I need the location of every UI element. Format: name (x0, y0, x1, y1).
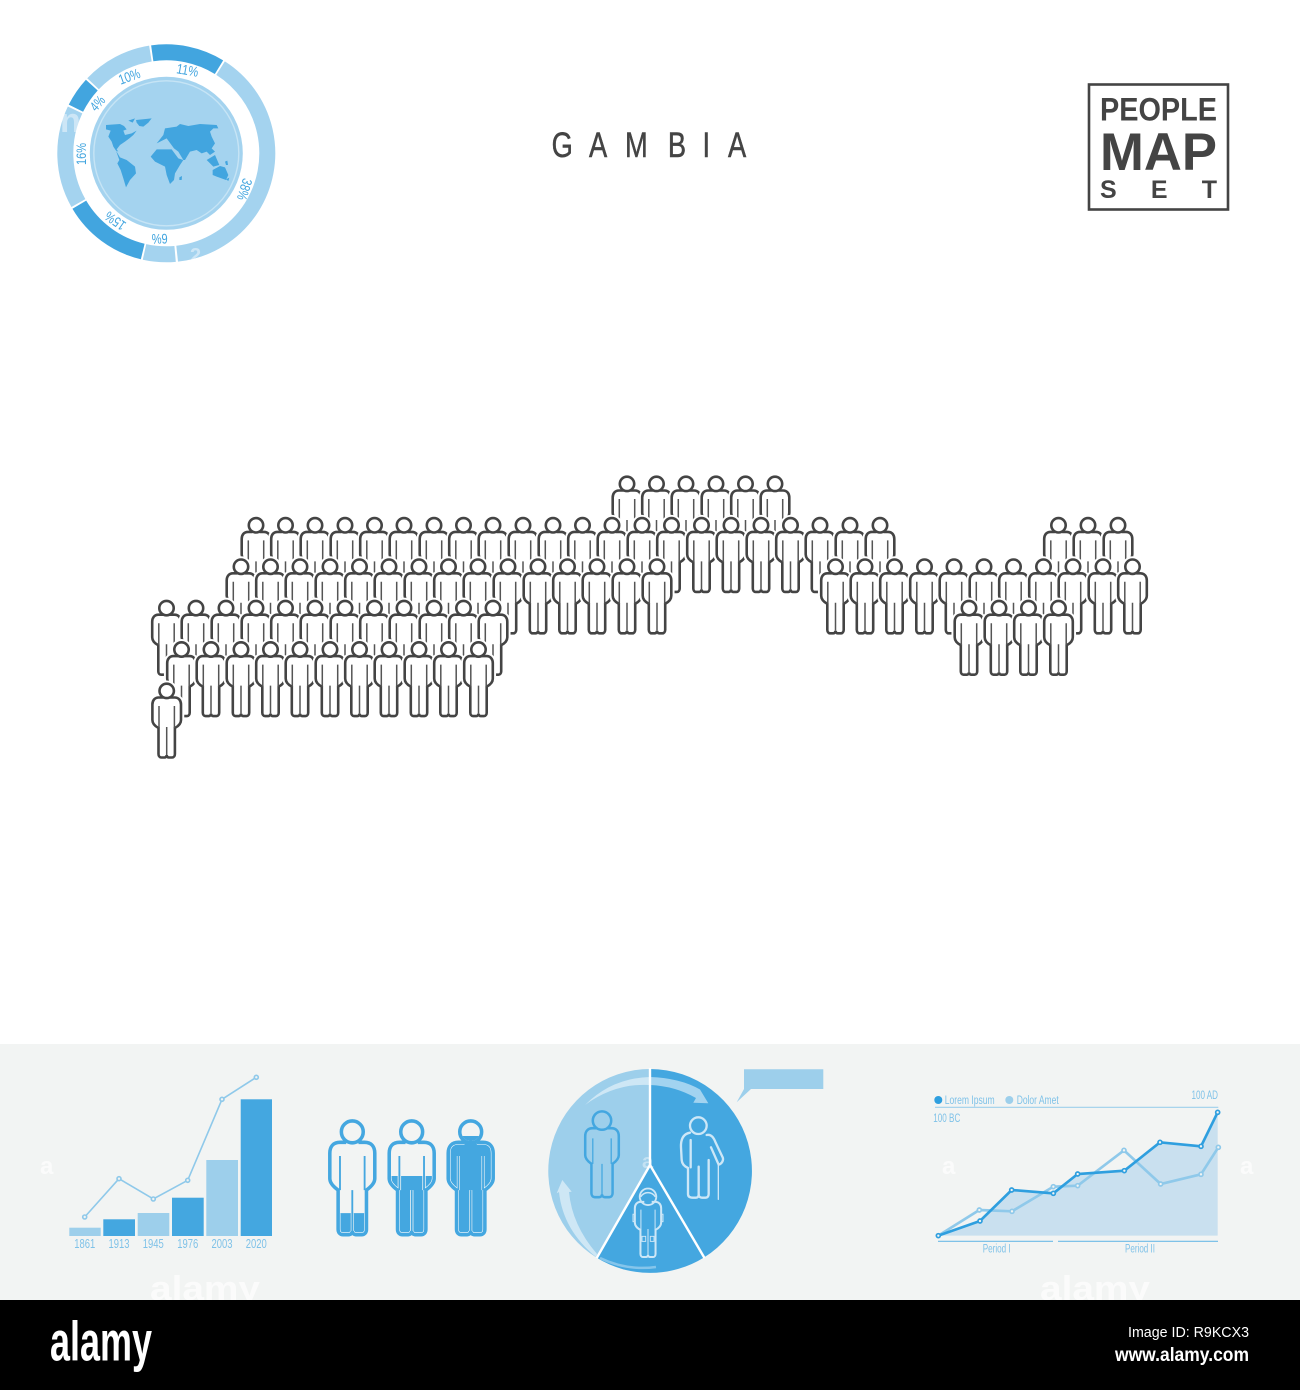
donut chart with world map (24, 11, 309, 296)
year labels: 1861 (74, 1236, 95, 1251)
year labels: 1976 (177, 1236, 198, 1251)
alamy logo: alamy (50, 1310, 152, 1373)
pie sector: elderly (650, 1069, 752, 1258)
website: www.alamy.com (1114, 1345, 1249, 1366)
panel watermarks: a (942, 1153, 956, 1180)
row 2 (242, 518, 1132, 592)
ring percentage labels (73, 60, 256, 247)
watermark glyphs on ring: 2 (190, 245, 201, 267)
area fill (938, 1112, 1218, 1236)
panel watermarks: alamy (150, 1270, 260, 1308)
people map of Gambia (152, 477, 1147, 758)
ring percentage labels: 16% (73, 143, 89, 165)
panel watermarks: alamy (1040, 1270, 1150, 1308)
donut ring segments (24, 11, 309, 296)
left cycle arrow (557, 1180, 597, 1257)
year labels: 1945 (143, 1236, 164, 1251)
legend: Lorem Ipsum (945, 1095, 995, 1107)
series: Lorem Ipsum (936, 1110, 1220, 1238)
year labels: 2003 (212, 1236, 232, 1251)
panel watermarks (40, 1153, 1254, 1308)
pie sector: child (597, 1166, 704, 1273)
panel watermarks: a (40, 1153, 54, 1180)
globe disc (90, 77, 243, 230)
ring percentage labels: 6% (151, 231, 168, 247)
plot (936, 1110, 1220, 1238)
ring percentage labels: 15% (102, 208, 129, 234)
icon: child (633, 1188, 663, 1257)
legend (934, 1095, 1059, 1107)
period labels: Period I (983, 1244, 1011, 1256)
pie chart: life stages (548, 1068, 752, 1273)
axis labels: 100 AD (1192, 1090, 1218, 1102)
icon: three people fill levels (330, 1121, 493, 1235)
badge: people map set: PEOPLE (1100, 92, 1217, 128)
icon: elderly person with cane (681, 1117, 723, 1199)
icon: adult (585, 1111, 619, 1197)
badge: people map set: SET (1100, 176, 1217, 204)
series: Dolor Amet (938, 1145, 1220, 1236)
ring percentage labels: 11% (175, 60, 200, 80)
row 6 (152, 684, 181, 758)
person fill full (448, 1121, 493, 1235)
bar chart with trend line (69, 1075, 272, 1251)
watermark glyphs on ring: n (60, 102, 81, 140)
ring percentage labels: 10% (116, 65, 142, 88)
year labels: 1913 (108, 1236, 130, 1251)
top cycle arrow (585, 1077, 708, 1105)
image id: Image ID: R9KCX3 (1128, 1324, 1249, 1341)
trend line (83, 1075, 258, 1219)
row 3 (227, 560, 1147, 633)
year labels: 2020 (246, 1236, 267, 1251)
line and area chart (933, 1090, 1220, 1256)
pie watermark: a (642, 1151, 654, 1173)
period labels (983, 1244, 1155, 1256)
axis labels: 100 BC (933, 1113, 960, 1125)
world map silhouette (106, 118, 229, 187)
pie sector: adult (548, 1069, 650, 1258)
legend: Dolor Amet (1017, 1095, 1059, 1107)
period labels: Period II (1125, 1244, 1155, 1256)
watermark glyphs on ring (60, 102, 201, 267)
ring percentage labels: 4% (86, 92, 108, 114)
title: GAMBIA (552, 126, 746, 165)
badge: people map set (1089, 84, 1228, 210)
bottom cycle arc (600, 1258, 656, 1268)
ring percentage labels: 38% (234, 177, 256, 202)
bars (69, 1099, 272, 1236)
sector dividers (597, 1068, 704, 1258)
footer bar (0, 1300, 1300, 1390)
year labels (74, 1236, 267, 1251)
person fill middle (389, 1121, 434, 1235)
badge: people map set: MAP (1100, 123, 1217, 182)
period axis (938, 1240, 1218, 1242)
row 5 (167, 642, 493, 716)
row 4 (152, 601, 1073, 675)
axis labels (933, 1090, 1218, 1125)
panel watermarks: a (1240, 1153, 1254, 1180)
top rule (935, 1106, 1218, 1108)
row 1 (613, 477, 789, 550)
person fill low (330, 1121, 375, 1235)
speech bubble callout (737, 1069, 823, 1102)
bottom panel background (0, 1044, 1300, 1300)
